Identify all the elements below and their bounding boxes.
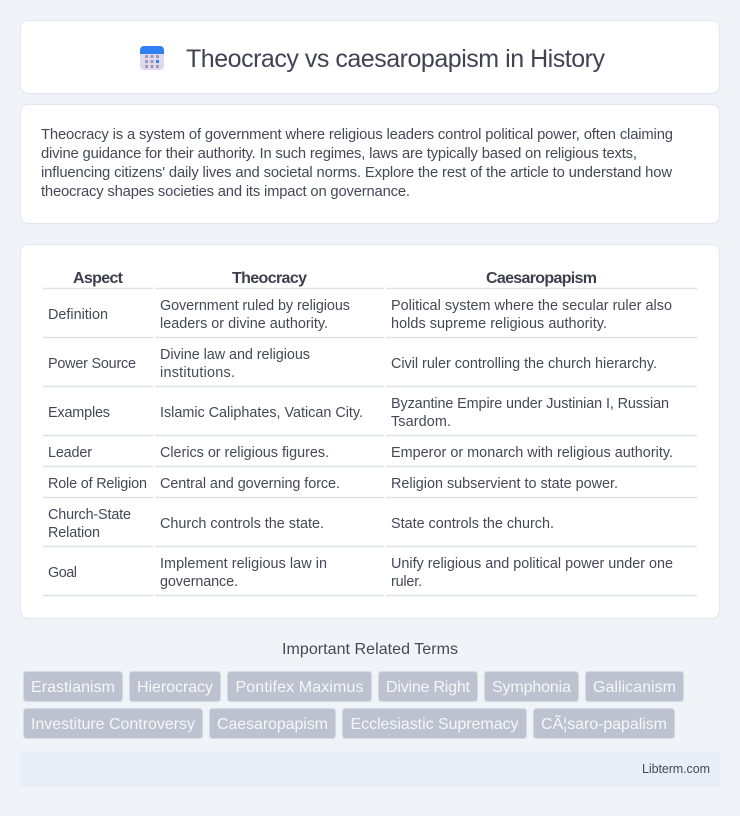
- row: role of religion: Religion subservient to state power.: [391, 476, 618, 492]
- row: examples: Byzantine Empire under Justinian I, Russian: [391, 396, 669, 412]
- row: church-state relation: Relation: [48, 525, 100, 541]
- row: leader: Leader: [48, 445, 92, 461]
- related term tags: Ecclesiastic Supremacy: [350, 716, 518, 733]
- row: church-state relation: Church-State: [48, 507, 131, 523]
- table header row: Aspect: [73, 270, 124, 287]
- intro text panel: divine guidance for their authority. In such regimes, laws are typically based on religious texts,: [41, 146, 637, 162]
- row: church-state relation: [48, 507, 554, 541]
- row: definition: leaders or divine authority.: [160, 316, 328, 332]
- row: goal: governance.: [160, 574, 238, 590]
- row: role of religion: Central and governing force.: [160, 476, 340, 492]
- intro text panel: theocracy shapes societies and its impact on governance.: [41, 184, 410, 200]
- related term tags: Gallicanism: [593, 679, 676, 696]
- comparison table panel: [20, 244, 720, 618]
- header panel: [20, 20, 720, 94]
- intro text panel: Theocracy is a system of government where religious leaders control political power, often claiming: [41, 127, 673, 143]
- row: leader: Emperor or monarch with religious authority.: [391, 445, 673, 461]
- row: goal: [48, 556, 673, 590]
- row: definition: Government ruled by religious: [160, 298, 350, 314]
- related term tags: Divine Right: [386, 679, 471, 696]
- row: definition: Definition: [48, 307, 108, 323]
- row: leader: Clerics or religious figures.: [160, 445, 329, 461]
- footer bar: [20, 752, 720, 786]
- related term tags: Investiture Controversy: [31, 716, 195, 733]
- row: goal: Goal: [48, 565, 77, 581]
- intro text panel: influencing citizens' daily lives and societal norms. Explore the rest of the article to understand how: [41, 165, 672, 181]
- row: examples: Examples: [48, 405, 110, 421]
- row: examples: Tsardom.: [391, 414, 451, 430]
- row: church-state relation: State controls the church.: [391, 516, 554, 532]
- row: role of religion: Role of Religion: [48, 476, 147, 492]
- row: power source: [48, 347, 657, 381]
- row: goal: ruler.: [391, 574, 422, 590]
- row: church-state relation: Church controls the state.: [160, 516, 324, 532]
- related term tags: Erastianism: [31, 679, 115, 696]
- footer bar: Libterm.com: [642, 762, 710, 776]
- row: definition: [48, 298, 672, 332]
- row: power source: institutions.: [160, 365, 235, 381]
- row: role of religion: [48, 476, 618, 492]
- related term tags: Hierocracy: [137, 679, 213, 696]
- row: definition: holds supreme religious authority.: [391, 316, 607, 332]
- table header row: Caesaropapism: [486, 270, 597, 287]
- row: leader: [48, 445, 673, 461]
- related term tags: Pontifex Maximus: [236, 679, 364, 696]
- table header row: Theocracy: [232, 270, 307, 287]
- title: Theocracy vs caesaropapism in History: [186, 45, 606, 73]
- table header row: [73, 270, 597, 287]
- row: examples: [48, 396, 669, 430]
- row: power source: Power Source: [48, 356, 136, 372]
- related term tags: Symphonia: [492, 679, 571, 696]
- related terms heading: Important Related Terms: [282, 641, 458, 658]
- row: goal: Implement religious law in: [160, 556, 327, 572]
- row: examples: Islamic Caliphates, Vatican City.: [160, 405, 363, 421]
- row: power source: Civil ruler controlling the church hierarchy.: [391, 356, 657, 372]
- related term tags: [24, 672, 684, 738]
- intro text panel: [20, 104, 720, 224]
- row: power source: Divine law and religious: [160, 347, 310, 363]
- related term tags: Caesaropapism: [217, 716, 328, 733]
- icon: calendar: [140, 46, 164, 70]
- row: goal: Unify religious and political power under one: [391, 556, 673, 572]
- related term tags: CÃ¦saro-papalism: [541, 713, 667, 733]
- row: definition: Political system where the secular ruler also: [391, 298, 672, 314]
